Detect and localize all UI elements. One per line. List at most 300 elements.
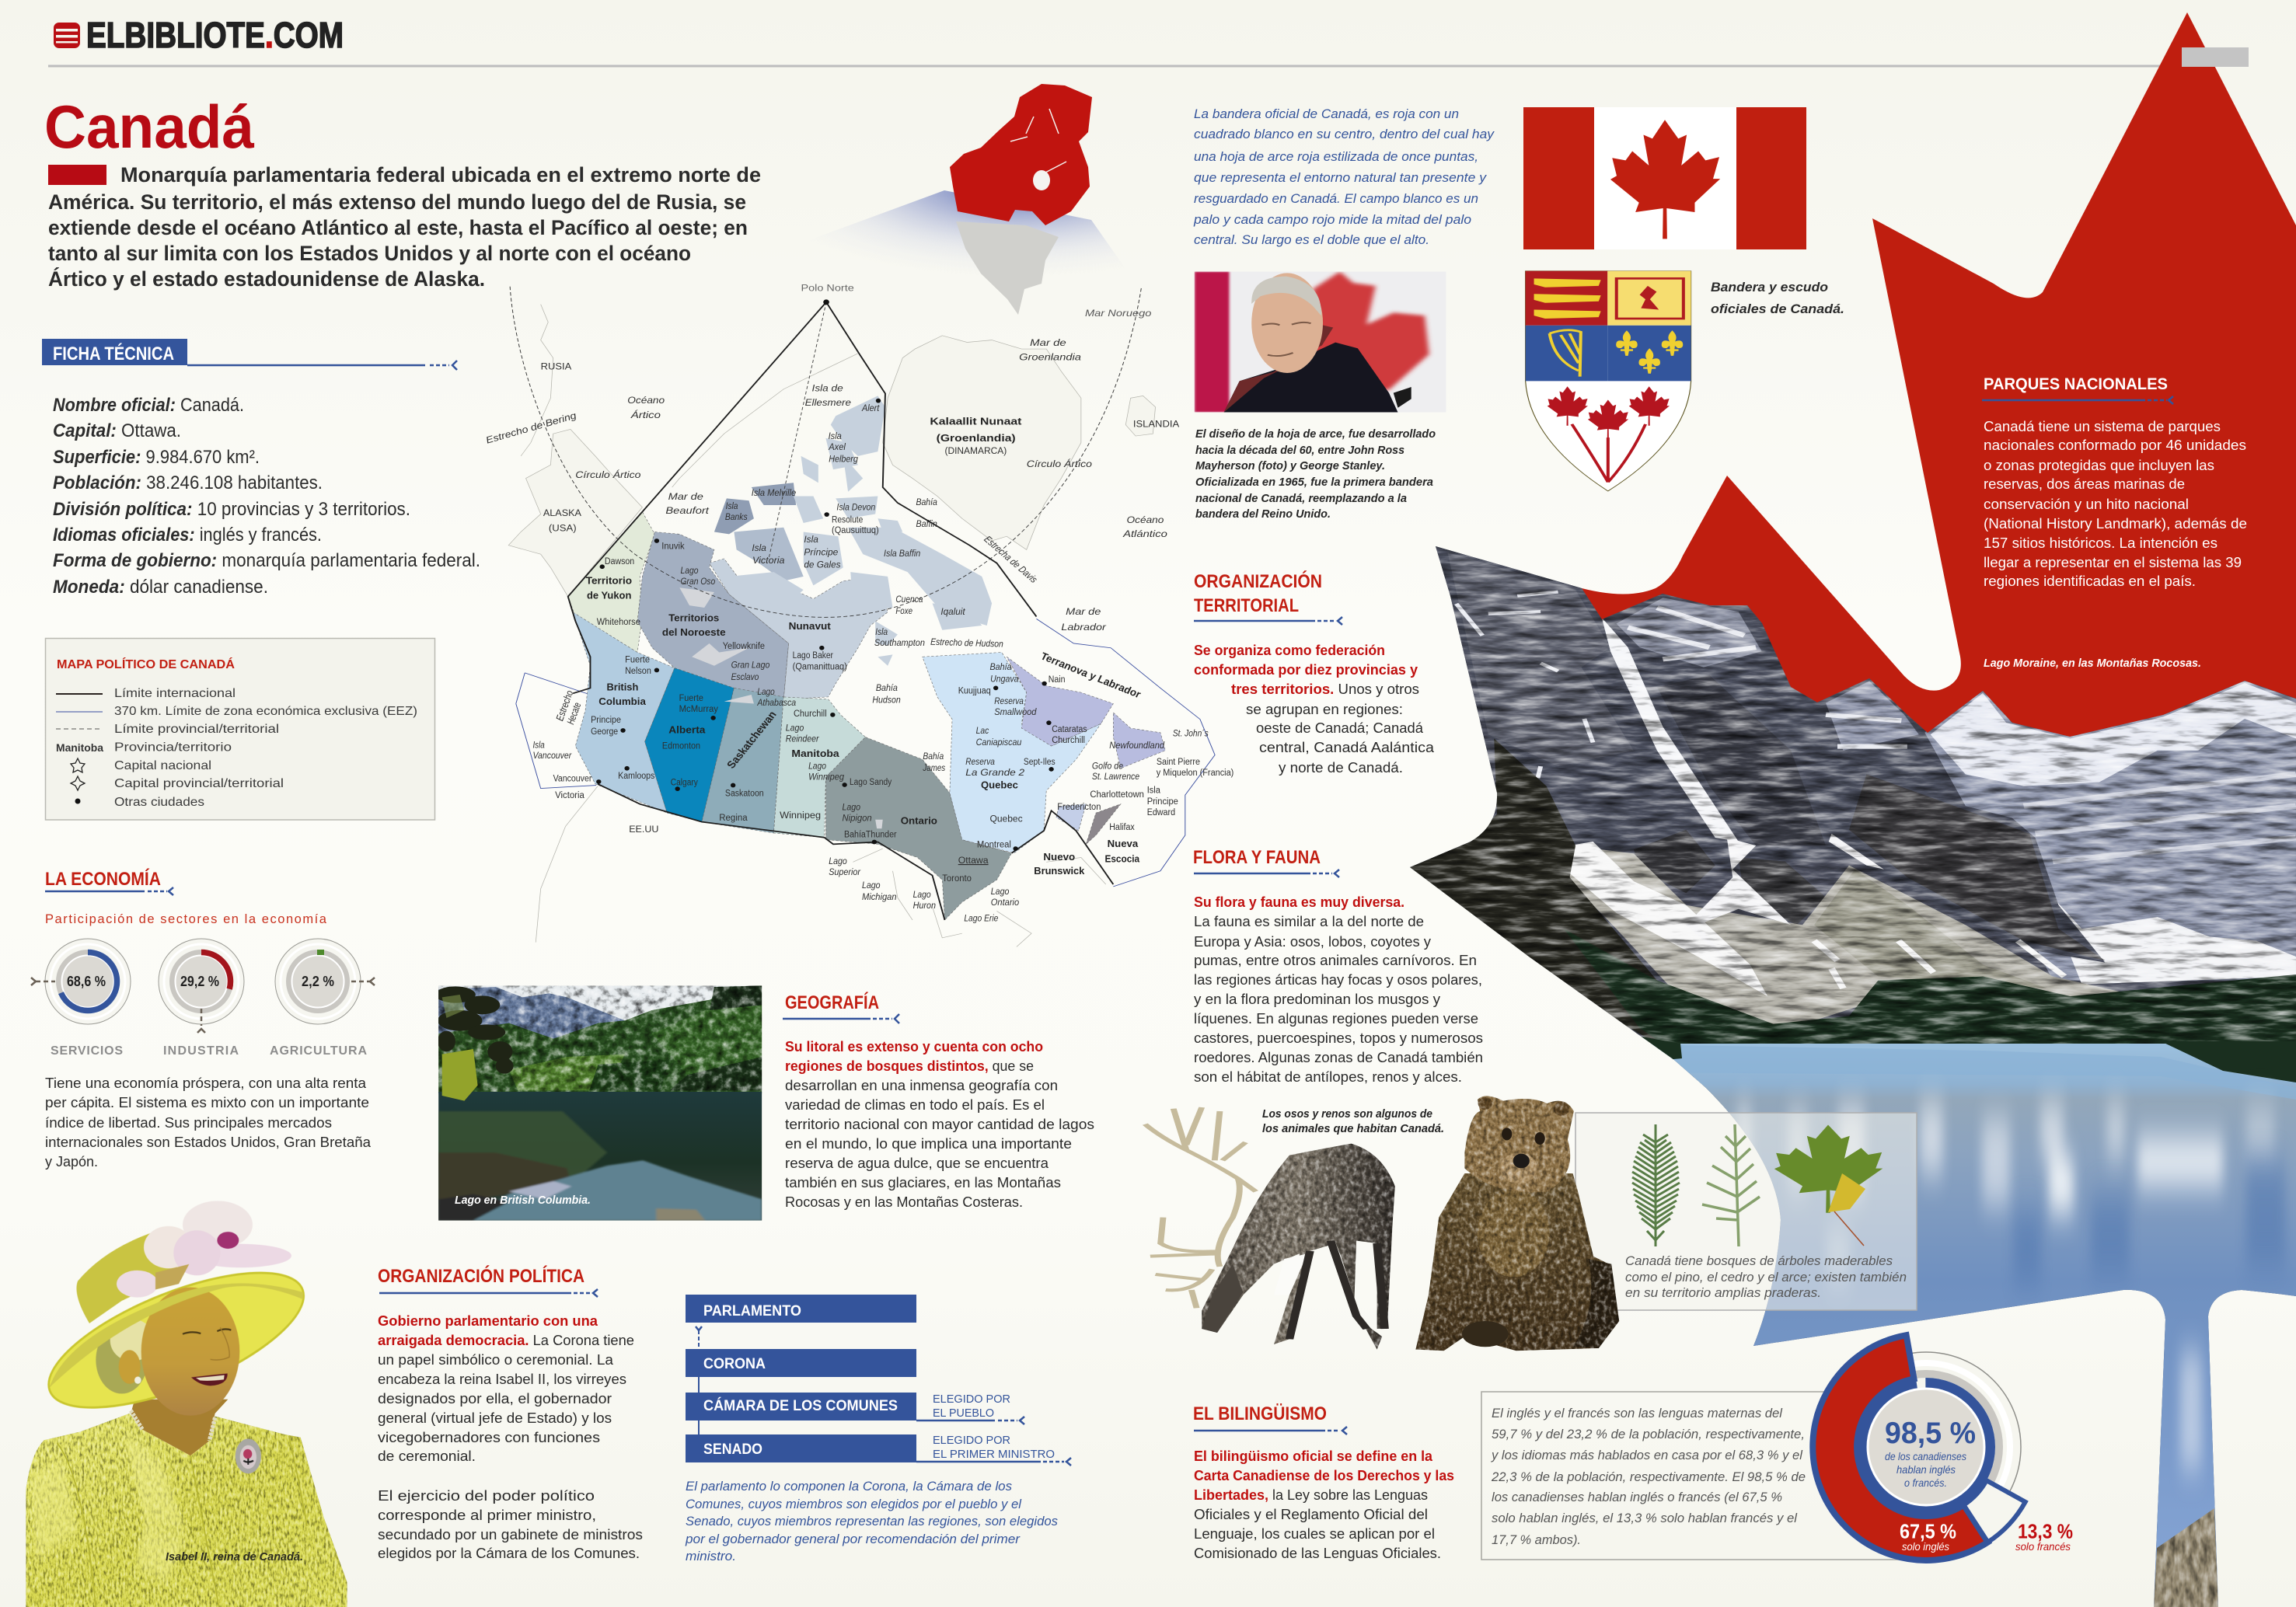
map labels: Resolute	[832, 514, 863, 525]
diagram: parlamento: SENADO	[703, 1441, 762, 1458]
text: geografía: Su litoral es extenso y cuenta con ocho	[785, 1038, 1043, 1054]
map labels: ISLANDIA	[1133, 418, 1180, 429]
panel: parques nacionales: o zonas protegidas que incluyen las	[1984, 457, 2214, 473]
map labels: Saskatchewan	[724, 709, 779, 771]
map labels: Whitehorse	[597, 616, 640, 627]
diagram: parlamento: CORONA	[703, 1356, 766, 1372]
map labels: Isla	[532, 739, 545, 750]
heading: ficha técnica	[42, 339, 457, 370]
map labels: Reindeer	[786, 733, 819, 744]
map labels: McMurray	[679, 702, 719, 714]
map labels: Lago	[991, 886, 1009, 897]
text: organización política: elegidos por la Cámara de los Comunes.	[378, 1545, 640, 1561]
map labels: Bahía	[876, 681, 898, 693]
text: bosques: Canadá tiene bosques de árboles maderables	[1625, 1254, 1893, 1268]
map labels: Baffin	[916, 518, 937, 529]
map labels: Nunavut	[789, 620, 831, 632]
map labels: George	[591, 726, 618, 737]
diagram: parlamento: EL PUEBLO	[933, 1407, 994, 1420]
panel: parques nacionales: regiones identificadas en el país.	[1984, 573, 2196, 589]
text: organización territorial: y norte de Canadá.	[1279, 759, 1403, 776]
text: flora y fauna: son el hábitat de antílopes, renos y alces.	[1194, 1068, 1462, 1085]
map labels: Principe	[591, 714, 621, 725]
text: flora y fauna: Europa y Asia: osos, lobos, coyotes y	[1194, 933, 1432, 950]
text: el bilingüismo: Libertades, la Ley sobre las Lenguas	[1194, 1487, 1428, 1503]
text: economía: índice de libertad. Sus principales mercados	[45, 1114, 332, 1131]
diagram: parlamento: PARLAMENTO	[703, 1303, 801, 1319]
map labels: Estrecho de Hudson	[930, 636, 1003, 649]
map labels: Alert	[861, 403, 880, 413]
map labels: Churchill	[794, 708, 827, 719]
map labels: Superior	[829, 866, 861, 877]
text: organización territorial: Se organiza como federación	[1194, 642, 1385, 658]
map labels: Ungava	[990, 673, 1019, 684]
chart: idiomas: solo inglés	[1902, 1540, 1949, 1553]
text: el bilingüismo: Oficiales y el Reglamento Oficial del	[1194, 1506, 1428, 1522]
map labels: Fredericton	[1057, 801, 1101, 812]
text: flora y fauna: y en la flora predominan los musgos y	[1194, 991, 1441, 1007]
text: bandera: central. Su largo es el doble que el alto.	[1194, 232, 1429, 247]
coat of arms	[1526, 271, 1691, 491]
caption: John Ross Matheson: bandera del Reino Unido.	[1195, 507, 1331, 521]
panel: legend: Límite provincial/territorial	[114, 723, 279, 736]
international border	[568, 302, 1113, 920]
text: organización territorial: tres territorios. Unos y otros	[1231, 681, 1419, 697]
heading: organización territorial: TERRITORIAL	[1194, 595, 1299, 616]
map labels: Ottawa	[958, 855, 989, 866]
map labels: Winnipeg	[808, 771, 844, 782]
map labels: Michigan	[862, 891, 897, 902]
panel: lenguas: y los idiomas más hablados en casa por el 68,3 % y el	[1491, 1448, 1803, 1462]
neighbouring lands	[508, 305, 1156, 946]
intro: tanto al sur limita con los Estados Unidos y al norte con el océano	[48, 242, 691, 265]
text: flora y fauna: La fauna es similar a la del norte de	[1194, 913, 1424, 929]
map labels: Winnipeg	[780, 810, 821, 821]
donut: servicios: 68,6 %	[67, 974, 106, 989]
text: organización política: El ejercicio del poder político	[378, 1487, 595, 1504]
text: organización política: de ceremonial.	[378, 1448, 476, 1464]
text: flora y fauna: pumas, entre otros animales carnívoros. En	[1194, 952, 1477, 968]
map labels: Isla	[1147, 784, 1161, 795]
panel: legend: Manitoba	[56, 742, 104, 754]
map labels: Smallwood	[994, 706, 1037, 717]
panel: lenguas: 17,7 % ambos).	[1492, 1532, 1581, 1547]
illustration: reno	[1145, 1107, 1395, 1350]
map labels: La Grande 2	[965, 767, 1024, 778]
EEZ limit	[516, 619, 1215, 887]
text: bandera: que representa el entorno natural tan presente y	[1194, 170, 1488, 185]
illustration: oso	[1415, 1096, 1619, 1351]
icon: hoja de arce	[1774, 1125, 1883, 1246]
map labels: EE.UU	[629, 823, 658, 835]
map labels: Halifax	[1109, 821, 1135, 832]
map labels: Cuenca	[895, 594, 923, 605]
map labels: Atlántico	[1122, 528, 1167, 539]
heading: flora y fauna: FLORA Y FAUNA	[1193, 847, 1321, 868]
map labels: Saint Pierre	[1157, 756, 1200, 767]
map labels: Lago	[842, 801, 860, 813]
map labels: Edward	[1147, 807, 1175, 817]
map labels: (Groenlandia)	[937, 432, 1016, 444]
map labels: Océano	[1127, 514, 1164, 525]
map labels: Nain	[1049, 674, 1065, 685]
economy subtitle: Participación de sectores en la economía	[45, 912, 327, 926]
map labels: Mar de	[1030, 337, 1066, 348]
panel: parques nacionales: llegar a representar en el sistema las 39	[1984, 554, 2242, 570]
map labels: Isla	[726, 500, 738, 511]
map labels: Isla	[829, 431, 842, 441]
text: bandera: resguardado en Canadá. El campo blanco es un	[1194, 191, 1478, 206]
map labels: (Qausuittuq)	[832, 525, 879, 535]
map labels: Lago	[757, 686, 775, 697]
map labels: Isla Baffin	[884, 548, 920, 559]
photo: lago en British Columbia	[435, 985, 762, 1221]
text: el bilingüismo: Lenguaje, los cuales se aplican por el	[1194, 1525, 1435, 1542]
text: organización territorial	[1194, 642, 1435, 776]
map labels: Kamloops	[618, 770, 654, 781]
caption: John Ross Matheson: hacia la década del 60, entre John Ross	[1195, 444, 1404, 457]
map labels: Ontario	[991, 897, 1019, 908]
diagram: parlamento	[686, 1295, 1071, 1466]
map labels: (DINAMARCA)	[944, 445, 1007, 456]
map labels: St. Lawrence	[1092, 771, 1139, 782]
map labels: Isla	[804, 534, 818, 545]
text: economía: internacionales son Estados Unidos, Gran Bretaña	[45, 1134, 372, 1150]
text: organización territorial: conformada por diez provincias y	[1194, 661, 1418, 678]
map labels: Isla de	[812, 382, 843, 393]
map labels: de Yukon	[587, 589, 631, 601]
photo: John Ross Matheson	[1195, 272, 1446, 413]
panel: red maple leaf backdrop	[1578, 12, 2296, 777]
map labels: Lago	[862, 880, 881, 891]
donut: industria	[159, 939, 244, 1058]
text: organización territorial: oeste de Canadá; Canadá	[1256, 720, 1424, 736]
text: organización política: vicegobernadores con funciones	[378, 1429, 600, 1445]
map labels: ALASKA	[543, 507, 581, 518]
panel: legend: Capital provincial/territorial	[114, 777, 284, 790]
map labels: Escocia	[1104, 852, 1139, 864]
map labels: Estrecho	[553, 689, 576, 722]
map labels: RUSIA	[541, 361, 572, 371]
map labels: Ellesmere	[805, 397, 851, 408]
caption: Lago Moraine: Lago Moraine, en las Montañas Rocosas.	[1984, 657, 2201, 670]
text: parlamento: ministro.	[686, 1549, 736, 1563]
map labels: Brunswick	[1034, 864, 1085, 877]
map labels: Bahía	[923, 751, 944, 762]
caption: John Ross Matheson: nacional de Canadá, reemplazando a la	[1195, 492, 1407, 505]
heading: organización territorial: ORGANIZACIÓN	[1194, 570, 1322, 592]
map labels: Groenlandia	[1019, 351, 1081, 362]
cities	[596, 299, 1054, 851]
map labels: Esclavo	[731, 671, 759, 682]
map labels: Dawson	[605, 555, 634, 566]
map labels: Nuevo	[1043, 851, 1075, 863]
map labels: Calgary	[671, 776, 698, 787]
text: geografía: Rocosas y en las Montañas Costeras.	[785, 1194, 1023, 1210]
text: organización política: Gobierno parlamentario con una	[378, 1312, 598, 1329]
chart: idiomas: 13,3 %	[2018, 1520, 2073, 1543]
map labels: Lago Erie	[964, 912, 998, 923]
map labels: Fuerte	[679, 692, 703, 703]
text: parlamento: Comunes, cuyos miembros son elegidos por el pueblo y el	[686, 1497, 1022, 1511]
map labels: Lac	[976, 725, 989, 736]
intro: Ártico y el estado estadounidense de Alaska.	[48, 267, 485, 291]
map labels: Nueva	[1108, 837, 1138, 849]
map labels: Victoria	[752, 555, 784, 566]
text: parlamento: El parlamento lo componen la Corona, la Cámara de los	[686, 1480, 1012, 1494]
map labels: BahíaThunder	[844, 828, 897, 840]
map labels: Banks	[725, 511, 748, 522]
map labels: Isla	[875, 626, 888, 637]
icon: cedro	[1702, 1124, 1760, 1246]
panel: parques nacionales: Canadá tiene un sistema de parques	[1984, 418, 2221, 434]
panel: lenguas	[1481, 1392, 1913, 1560]
map labels: Estrecho de Bering	[484, 410, 577, 445]
map labels: Gran Oso	[681, 576, 715, 587]
fact list: Población: 38.246.108 habitantes.	[53, 472, 323, 493]
map labels: Lago Baker	[793, 650, 834, 661]
map labels: Fuerte	[625, 654, 650, 665]
panel: legend: MAPA POLÍTICO DE CANADÁ	[57, 657, 235, 671]
text: economía: Tiene una economía próspera, con una alta renta	[45, 1075, 367, 1091]
text: bosques: en su territorio amplias praderas.	[1625, 1286, 1821, 1300]
map labels: Labrador	[1061, 621, 1107, 633]
map labels: Círculo Ártico	[575, 469, 641, 480]
text: parlamento	[685, 1480, 1058, 1563]
map labels: Quebec	[990, 813, 1023, 824]
map labels: Alberta	[668, 723, 706, 735]
fact list: Capital: Ottawa.	[53, 420, 181, 441]
text: organización política: un papel simbólico o ceremonial. La	[378, 1351, 614, 1368]
text: el bilingüismo: El bilingüismo oficial se define en la	[1194, 1448, 1433, 1464]
text: geografía: también en sus glaciares, en las Montañas	[785, 1174, 1061, 1190]
map labels: Toronto	[942, 873, 972, 884]
panel: parques nacionales: 157 sitios históricos. La intención es	[1984, 535, 2217, 551]
text: organización política: secundado por un gabinete de ministros	[378, 1526, 643, 1543]
caption: lago: Lago en British Columbia.	[455, 1194, 591, 1207]
map labels: Gran Lago	[731, 659, 769, 670]
map labels: Terranova y Labrador	[1039, 650, 1143, 700]
chart: idiomas: solo francés	[2015, 1540, 2071, 1553]
fact list: Superficie: 9.984.670 km².	[53, 447, 260, 468]
map labels: Nelson	[625, 665, 651, 676]
panel: parques nacionales: PARQUES NACIONALES	[1984, 375, 2168, 393]
map labels: (USA)	[549, 522, 577, 533]
logo: elbibliote.com: ELBIBLIOTE.COM	[86, 15, 344, 55]
text: economía: per cápita. El sistema es mixto con un importante	[45, 1094, 369, 1110]
panel: parques nacionales: nacionales conformado por 46 unidades	[1984, 437, 2246, 453]
heading: organización territorial	[1194, 570, 1342, 625]
map labels: Foxe	[895, 605, 912, 616]
map labels: Iqaluit	[940, 606, 965, 617]
caption: bandera y escudo	[1711, 280, 1844, 316]
map labels: Ontario	[901, 814, 937, 826]
heading: el bilingüismo	[1193, 1403, 1347, 1434]
map labels: Estrecha de Davis	[982, 534, 1041, 585]
map labels: Reserva	[994, 695, 1024, 706]
text: organización territorial: se agrupan en regiones:	[1246, 701, 1403, 717]
panel: legend: Límite internacional	[114, 687, 236, 700]
text: geografía: territorio nacional con mayor cantidad de lagos	[785, 1116, 1094, 1132]
map labels: Polo Norte	[801, 282, 854, 293]
fact list: Moneda: dólar canadiense.	[53, 577, 268, 598]
caption: animales: los animales que habitan Canadá.	[1262, 1123, 1444, 1135]
map labels: Lago	[913, 889, 931, 900]
lakes	[679, 587, 883, 828]
photo: Lago Moraine	[1384, 528, 2296, 1607]
map labels: Territorios	[668, 612, 720, 623]
text: el bilingüismo	[1194, 1448, 1454, 1561]
text: parlamento: por el gobernador general por recomendación del primer	[685, 1532, 1021, 1546]
caption: animales	[1262, 1108, 1444, 1135]
text: organización política: general (virtual jefe de Estado) y los	[378, 1410, 612, 1426]
fact list	[53, 395, 480, 598]
map labels: Caniapiscau	[976, 737, 1021, 748]
gray tab top right	[2182, 47, 2249, 67]
heading: geografía	[783, 992, 899, 1023]
text: flora y fauna	[1194, 894, 1483, 1085]
text: economía	[45, 1075, 372, 1170]
text: geografía: desarrollan en una inmensa geografía con	[785, 1077, 1058, 1093]
map labels: Vancouver	[553, 772, 592, 783]
map labels: Círculo Ártico	[1027, 458, 1092, 469]
caption: Isabel II: Isabel II, reina de Canadá.	[166, 1550, 303, 1563]
text: flora y fauna: las regiones árticas hay focas y osos polares,	[1194, 971, 1482, 988]
text: organización política: encabeza la reina Isabel II, los virreyes	[378, 1371, 626, 1387]
caption: bandera y escudo: Bandera y escudo	[1711, 280, 1828, 295]
intro: América. Su territorio, el más extenso del mundo luego del de Rusia, se	[48, 190, 746, 214]
text: bosques	[1625, 1254, 1907, 1300]
heading: organización política	[378, 1265, 598, 1297]
chart: idiomas: hablan inglés	[1896, 1463, 1956, 1476]
map labels: Hudson	[872, 694, 901, 705]
map labels: Hecate	[564, 701, 584, 726]
text: geografía: en el mundo, lo que implica una importante	[785, 1135, 1072, 1152]
donut: agricultura: 2,2 %	[302, 974, 334, 989]
map labels: Vancouver	[532, 750, 572, 761]
text: bandera: palo y cada campo rojo mide la mitad del palo	[1193, 212, 1471, 227]
heading: organización política: ORGANIZACIÓN POLÍTICA	[378, 1265, 584, 1287]
map labels: Charlottetown	[1090, 789, 1144, 800]
map labels: Beaufort	[665, 505, 709, 516]
heading: el bilingüismo: EL BILINGÜISMO	[1193, 1403, 1327, 1424]
text: bandera: una hoja de arce roja estilizada de once puntas,	[1194, 149, 1478, 164]
map labels: Victoria	[555, 790, 585, 800]
text: geografía: variedad de climas en todo el país. Es el	[785, 1096, 1045, 1113]
map labels: Isla Devon	[836, 501, 875, 512]
text: geografía: reserva de agua dulce, que se encuentra	[785, 1155, 1049, 1171]
diagram: parlamento: ELEGIDO POR	[933, 1434, 1010, 1447]
text: geografía	[785, 1038, 1094, 1210]
map labels: Cataratas	[1052, 723, 1087, 734]
map labels: Lago	[681, 564, 698, 576]
map labels: Manitoba	[791, 748, 839, 759]
map labels: Inuvik	[661, 540, 685, 551]
map labels: Principe	[1147, 796, 1178, 807]
caption: John Ross Matheson: Oficializada en 1965, fue la primera bandera	[1195, 476, 1433, 489]
text: bandera	[1193, 106, 1495, 247]
panel: legend: Capital nacional	[114, 759, 211, 772]
map labels: Mar Noruego	[1085, 308, 1151, 319]
text: economía: y Japón.	[45, 1153, 98, 1170]
text: bosques: como el pino, el cedro y el arce; existen también	[1625, 1271, 1907, 1285]
diagram: parlamento: CÁMARA DE LOS COMUNES	[703, 1397, 898, 1414]
locator triangle	[575, 190, 1166, 326]
map labels: Kuujjuaq	[958, 685, 991, 695]
chart: idiomas: 67,5 %	[1900, 1520, 1956, 1543]
intro: Monarquía parlamentaria federal ubicada en el extremo norte de	[120, 163, 761, 186]
map labels: Huron	[913, 900, 936, 911]
map labels: Sept-Iles	[1024, 756, 1056, 767]
caption: bandera y escudo: oficiales de Canadá.	[1711, 302, 1844, 316]
map labels: Newfoundland	[1109, 740, 1165, 751]
caption: John Ross Matheson: Mayherson (foto) y George Stanley.	[1195, 459, 1385, 472]
icon: pino	[1632, 1124, 1680, 1246]
panel: lenguas: El inglés y el francés son las lenguas maternas del	[1492, 1406, 1783, 1421]
caption: John Ross Matheson	[1195, 427, 1436, 521]
map labels: Nipigon	[842, 812, 872, 823]
map labels: Southampton	[874, 637, 925, 648]
text: parlamento: Senado, cuyos miembros representan las regiones, son elegidos	[686, 1515, 1058, 1529]
map labels: Axel	[828, 441, 846, 452]
caption: John Ross Matheson: El diseño de la hoja de arce, fue desarrollado	[1195, 427, 1436, 441]
map labels: Territorio	[586, 574, 632, 586]
panel: parques nacionales	[1982, 375, 2247, 589]
map labels: Churchill	[1052, 734, 1085, 745]
map labels: Helberg	[829, 453, 858, 464]
panel: parques nacionales: (National History Landmark), además de	[1984, 515, 2247, 532]
text: flora y fauna: Su flora y fauna es muy diversa.	[1194, 894, 1404, 910]
panel: legend	[45, 639, 435, 820]
panel: lenguas: 22,3 % de la población, respectivamente. El 98,5 % de	[1491, 1469, 1806, 1484]
donut: servicios	[31, 939, 131, 1058]
map labels: Lago	[808, 760, 826, 771]
map labels: British	[606, 681, 638, 692]
text: organización política: designados por ella, el gobernador	[378, 1390, 612, 1407]
map labels: Lago Sandy	[850, 776, 892, 787]
text: flora y fauna: castores, puercoespines, topos y numerosos	[1194, 1030, 1483, 1046]
map labels: Príncipe	[804, 546, 838, 557]
map labels: Columbia	[598, 695, 646, 707]
donut: agricultura	[270, 939, 375, 1058]
panel: legend: Provincia/territorio	[114, 741, 232, 754]
text: organización política: arraigada democracia. La Corona tiene	[378, 1332, 634, 1348]
map labels: Bahía	[990, 661, 1012, 672]
heading: ficha técnica: FICHA TÉCNICA	[53, 343, 174, 364]
caption: animales: Los osos y renos son algunos de	[1262, 1108, 1432, 1121]
map labels: Golfo de	[1092, 760, 1123, 771]
map labels: Kalaallit Nunaat	[930, 415, 1022, 427]
fact list: Nombre oficial: Canadá.	[53, 395, 244, 416]
panel: lenguas: los canadienses hablan inglés o francés (el 67,5 %	[1492, 1490, 1782, 1504]
fact list: Idiomas oficiales: inglés y francés.	[53, 525, 322, 546]
panel: legend: 370 km. Límite de zona económica exclusiva (EEZ)	[114, 705, 417, 718]
donut: agricultura: AGRICULTURA	[270, 1044, 367, 1058]
map labels: Mar de	[668, 491, 703, 502]
map labels: St. John´s	[1173, 727, 1209, 738]
panel: árboles	[1575, 1113, 1917, 1310]
map labels: y Miquelon (Francia)	[1157, 767, 1233, 778]
map labels: Ártico	[630, 410, 661, 420]
map labels: (Qamanittuaq)	[793, 661, 847, 671]
diagram: parlamento: EL PRIMER MINISTRO	[933, 1448, 1055, 1461]
map labels: Bahía	[916, 497, 937, 507]
text: geografía: regiones de bosques distintos, que se	[785, 1058, 1034, 1074]
donut: industria: 29,2 %	[180, 974, 219, 989]
chart: idiomas: 98,5 %	[1885, 1417, 1976, 1450]
chart: idiomas: o francés.	[1904, 1476, 1947, 1489]
map labels: Saskatoon	[725, 787, 764, 798]
